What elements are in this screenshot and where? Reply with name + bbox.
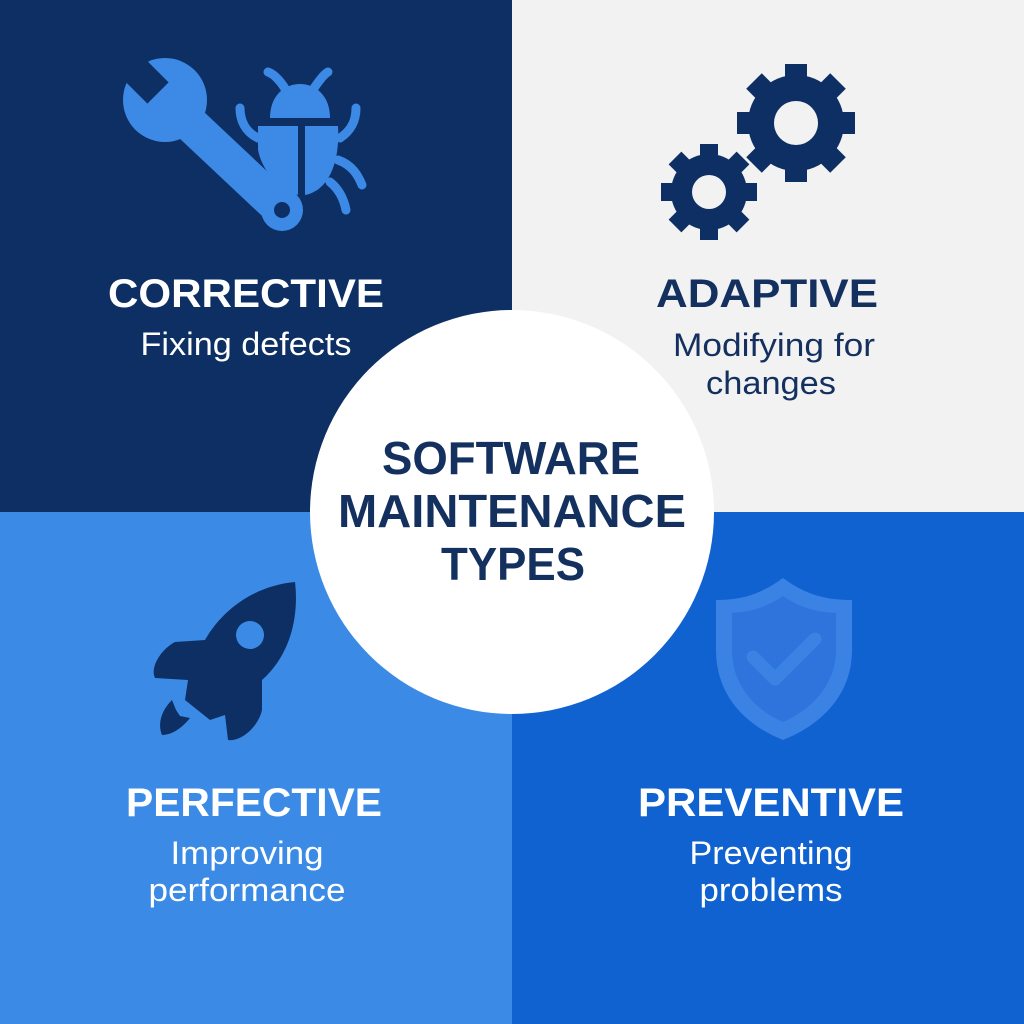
- heading: preventive: PREVENTIVE: [638, 781, 904, 825]
- text: preventing problems: problems: [700, 872, 842, 908]
- text: modifying for changes: [673, 327, 875, 401]
- icon: wrench: [112, 47, 303, 231]
- center circle title: TYPES: [441, 538, 585, 590]
- heading: adaptive: ADAPTIVE: [656, 272, 878, 316]
- text: preventing problems: Preventing: [690, 835, 852, 871]
- heading: perfective: PERFECTIVE: [126, 781, 382, 825]
- panel: corrective: [0, 0, 512, 512]
- text: improving performance: [148, 835, 346, 908]
- text: preventing problems: [690, 835, 852, 908]
- heading: corrective: CORRECTIVE: [108, 272, 384, 316]
- center circle title: [310, 310, 714, 714]
- center circle title: SOFTWARE: [382, 432, 640, 484]
- text: modifying for changes: Modifying for: [673, 327, 875, 363]
- text: fixing defects: Fixing defects: [140, 326, 352, 362]
- text: improving performance: Improving: [170, 835, 324, 871]
- text: improving performance: performance: [148, 872, 346, 908]
- icon: rocket: [154, 582, 296, 740]
- text: modifying for changes: changes: [706, 365, 836, 401]
- panel: perfective: [0, 512, 512, 1024]
- panel: adaptive: [512, 0, 1024, 512]
- icon: bug: [240, 72, 362, 210]
- icon: shield: [716, 578, 852, 740]
- panel: preventive: [512, 512, 1024, 1024]
- center circle title: MAINTENANCE: [338, 485, 686, 537]
- icon: gears: [661, 64, 855, 240]
